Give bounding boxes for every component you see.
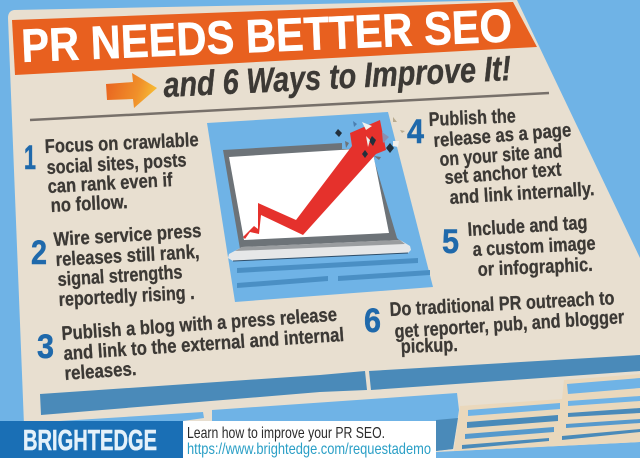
laptop base (228, 240, 411, 261)
item 4: release as a page (433, 119, 572, 152)
footer (0, 421, 436, 458)
footer message (183, 421, 436, 458)
item 5: Include and tag (467, 212, 588, 241)
item 1: no follow. (50, 191, 128, 217)
item 2: reportedly rising . (58, 282, 195, 311)
item 5: a custom image (472, 233, 596, 261)
item 3: 3 (37, 328, 54, 366)
debris (335, 129, 394, 158)
footer logo (0, 421, 183, 458)
item 1: can rank even if (47, 169, 174, 198)
item 5: 5 (442, 223, 459, 261)
item 4: set anchor text (444, 158, 562, 189)
item 4 (407, 105, 595, 209)
item 6: pickup. (400, 334, 458, 358)
item 6 (364, 287, 625, 358)
item 5 (442, 212, 596, 281)
item 2: signal strengths (57, 261, 183, 291)
item 3 (37, 304, 345, 385)
item 1: 1 (24, 139, 36, 177)
item 4: 4 (407, 113, 424, 151)
item 4: on your site and (439, 140, 563, 171)
subtitle: and 6 Ways to Improve It! (162, 49, 512, 105)
red chart line (243, 120, 386, 239)
item 6: 6 (364, 302, 381, 340)
item 1: social sites, posts (46, 149, 187, 179)
item 1: Focus on crawlable (44, 129, 199, 158)
item 4: Publish the (428, 105, 516, 131)
footer logo: BRIGHTEDGE (23, 425, 157, 457)
item 1 (24, 129, 199, 217)
footer message: Learn how to improve your PR SEO. (187, 425, 385, 442)
item 2: Wire service press (53, 220, 202, 251)
laptop screen (223, 141, 400, 249)
item 3: and link to the external and internal (63, 324, 345, 365)
item 3: releases. (64, 358, 137, 385)
footer message: https://www.brightedge.com/requestademo (187, 441, 431, 458)
icon: orange arrow (106, 73, 157, 108)
newspaper columns (40, 355, 640, 451)
item 4: and link internally. (449, 178, 595, 209)
panel: laptop illustration (207, 112, 433, 302)
item 2: 2 (31, 234, 47, 272)
item 2 (31, 220, 202, 311)
item 5: or infographic. (477, 254, 593, 281)
item 3: Publish a blog with a press release (61, 304, 338, 345)
item 2: releases still rank, (55, 241, 200, 271)
